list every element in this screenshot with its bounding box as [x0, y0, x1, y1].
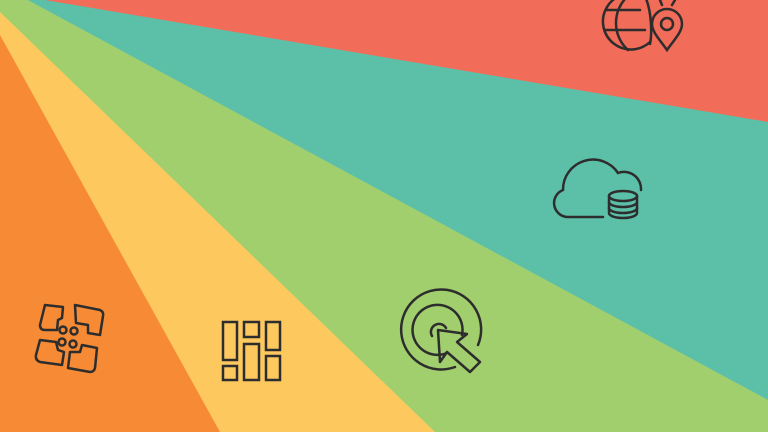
icon: target with cursor	[401, 289, 481, 372]
ray: orange	[0, 35, 220, 432]
icon: puzzle integration	[36, 305, 103, 372]
ray: yellow	[0, 12, 435, 432]
icon: globe with location pin	[603, 0, 682, 50]
icon: grid layout	[223, 322, 280, 380]
icon: cloud database	[554, 160, 641, 218]
